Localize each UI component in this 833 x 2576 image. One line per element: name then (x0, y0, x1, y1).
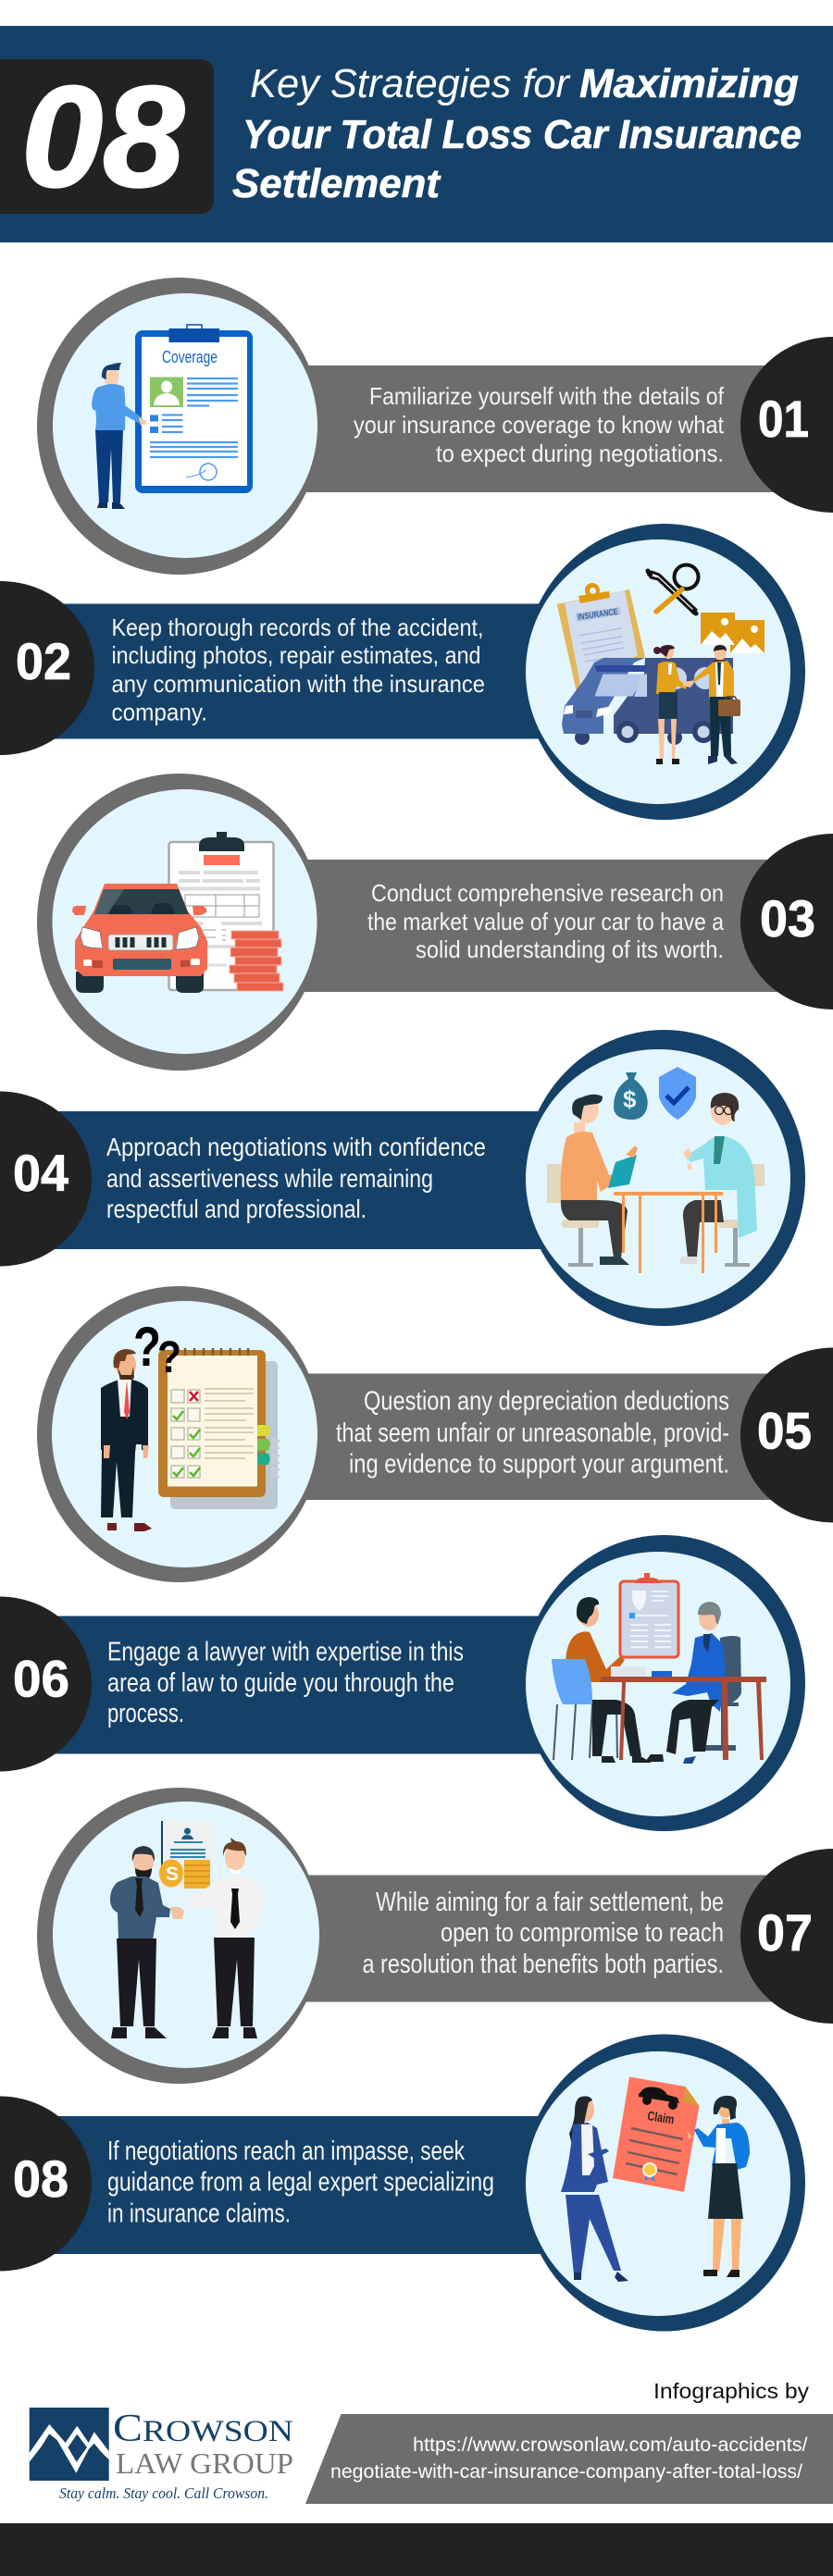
step 3 text (367, 879, 724, 963)
step 3 bar (278, 860, 787, 992)
step 3 illustration: red car, form and coins (37, 774, 321, 1071)
logo wordmark: CROWSON (113, 2408, 293, 2450)
step 7 illustration: handshake over coins: S (166, 1864, 179, 1885)
step 1 text: Familiarize yourself with the details of (369, 382, 725, 410)
step 2 text: Keep thorough records of the accident, (111, 613, 483, 641)
step 8 bar (0, 2116, 574, 2254)
step 6 text: Engage a lawyer with expertise in this (107, 1638, 464, 1667)
step 8 number badge: 08 (13, 2149, 68, 2208)
step 4 text: respectful and professional. (106, 1195, 367, 1223)
step 1 bar (278, 365, 787, 492)
step 1 number badge (740, 337, 833, 513)
step 1 illustration: man with coverage document (37, 278, 321, 575)
step 5 text (336, 1386, 729, 1479)
step 3 text: solid understanding of its worth. (416, 935, 724, 963)
crowson law group logo (30, 2408, 293, 2502)
step 6 number badge (0, 1597, 92, 1771)
step 7 text: While aiming for a fair settlement, be (376, 1888, 724, 1917)
step 5 text: Question any depreciation deductions (364, 1386, 729, 1416)
step 8 text: guidance from a legal expert specializing (107, 2167, 494, 2197)
bottom band (0, 2523, 833, 2576)
step 4 text (106, 1133, 486, 1223)
step 8 text (107, 2136, 494, 2228)
step 6 panel (0, 1535, 805, 1831)
step 1 text: to expect during negotiations. (436, 440, 724, 467)
step 7 panel (37, 1788, 833, 2084)
step 4 illustration: two men at a table: $ (623, 1085, 637, 1113)
step 3 number badge: 03 (760, 889, 815, 947)
title (232, 61, 802, 206)
step 8 illustration: two women with a claim document: Claim (647, 2108, 676, 2126)
logo wordmark: LAW GROUP (116, 2446, 293, 2480)
step 8 text: If negotiations reach an impasse, seek (107, 2136, 465, 2166)
title: Key Strategies for (250, 61, 571, 106)
credit label: Infographics by (653, 2379, 810, 2403)
question marks: ? (133, 1316, 161, 1378)
question marks (133, 1316, 181, 1382)
step 2 bar (0, 603, 574, 738)
step 1 text (354, 382, 725, 467)
step 2 panel (0, 524, 805, 820)
step 5 number badge (740, 1347, 833, 1523)
step 4 bar (0, 1111, 574, 1249)
big number box: 08 (21, 56, 184, 217)
step 6 text (107, 1638, 464, 1728)
footer credit (30, 2379, 833, 2504)
logo mark (30, 2408, 109, 2481)
step 3 text: the market value of your car to have a (367, 908, 724, 935)
step 4 number badge (0, 1092, 92, 1266)
step 5 bar (278, 1373, 787, 1500)
step 6 text: process. (107, 1699, 184, 1728)
step 6 text: area of law to guide you through the (107, 1668, 454, 1698)
step 7 number badge (740, 1849, 833, 2024)
step 5 text: ing evidence to support your argument. (349, 1449, 729, 1479)
step 8 panel (0, 2034, 805, 2332)
question marks: ? (157, 1333, 181, 1382)
step 3 number badge (740, 834, 833, 1009)
title: Your Total Loss Car Insurance (242, 112, 802, 157)
step 3 panel (37, 774, 833, 1071)
step 6 number badge: 06 (13, 1649, 69, 1708)
step 4 number badge: 04 (13, 1144, 68, 1202)
step 3 text: Conduct comprehensive research on (371, 879, 724, 907)
step 1 number badge: 01 (758, 390, 809, 448)
step 7 text: open to compromise to reach (441, 1918, 724, 1948)
step 8 illustration: two women with a claim document (523, 2034, 805, 2332)
step 5 illustration: man with checklist notebook (37, 1286, 321, 1582)
step 4 illustration: two men at a table (523, 1030, 805, 1326)
title: Maximizing (579, 61, 799, 106)
logo tagline: Stay calm. Stay cool. Call Crowson. (59, 2484, 268, 2502)
step 5 panel (37, 1286, 833, 1582)
step 2 illustration: van, insurance paper and handshake (523, 524, 805, 820)
step 4 text: and assertiveness while remaining (106, 1164, 433, 1193)
step 8 text: in insurance claims. (107, 2198, 291, 2228)
step 7 number badge: 07 (757, 1903, 813, 1962)
step 6 illustration: client and lawyer at a desk (523, 1535, 805, 1831)
step 6 bar (0, 1616, 574, 1754)
step 7 illustration: handshake over coins (37, 1788, 321, 2084)
step 7 bar (278, 1875, 787, 2002)
header banner (0, 26, 833, 242)
url banner: negotiate-with-car-insurance-company-after-total-loss/ (330, 2461, 802, 2483)
step 2 text: company. (111, 698, 207, 725)
step 2 text (111, 613, 485, 725)
step 2 illustration: van, insurance paper and handshake: INSURANCE (577, 607, 618, 623)
step 7 text: a resolution that benefits both parties. (363, 1950, 724, 1979)
url banner: https://www.crowsonlaw.com/auto-accidents/ (413, 2434, 808, 2456)
step 1 illustration: man with coverage document: Coverage (162, 348, 218, 366)
title: Settlement (232, 161, 441, 206)
step 5 number badge: 05 (757, 1401, 812, 1460)
step 4 text: Approach negotiations with confidence (106, 1133, 486, 1161)
step 1 panel (37, 278, 833, 575)
url banner (305, 2414, 833, 2504)
step 5 text: that seem unfair or unreasonable, provid- (336, 1418, 729, 1448)
step 4 panel (0, 1030, 805, 1326)
step 2 text: any communication with the insurance (111, 670, 485, 698)
step 7 text (363, 1888, 724, 1979)
step 8 number badge (0, 2097, 92, 2271)
step 2 text: including photos, repair estimates, and (111, 641, 481, 669)
step 1 text: your insurance coverage to know what (354, 411, 725, 439)
step 2 number badge: 02 (16, 632, 71, 690)
logo wordmark (113, 2408, 293, 2480)
step 2 number badge (0, 581, 94, 755)
